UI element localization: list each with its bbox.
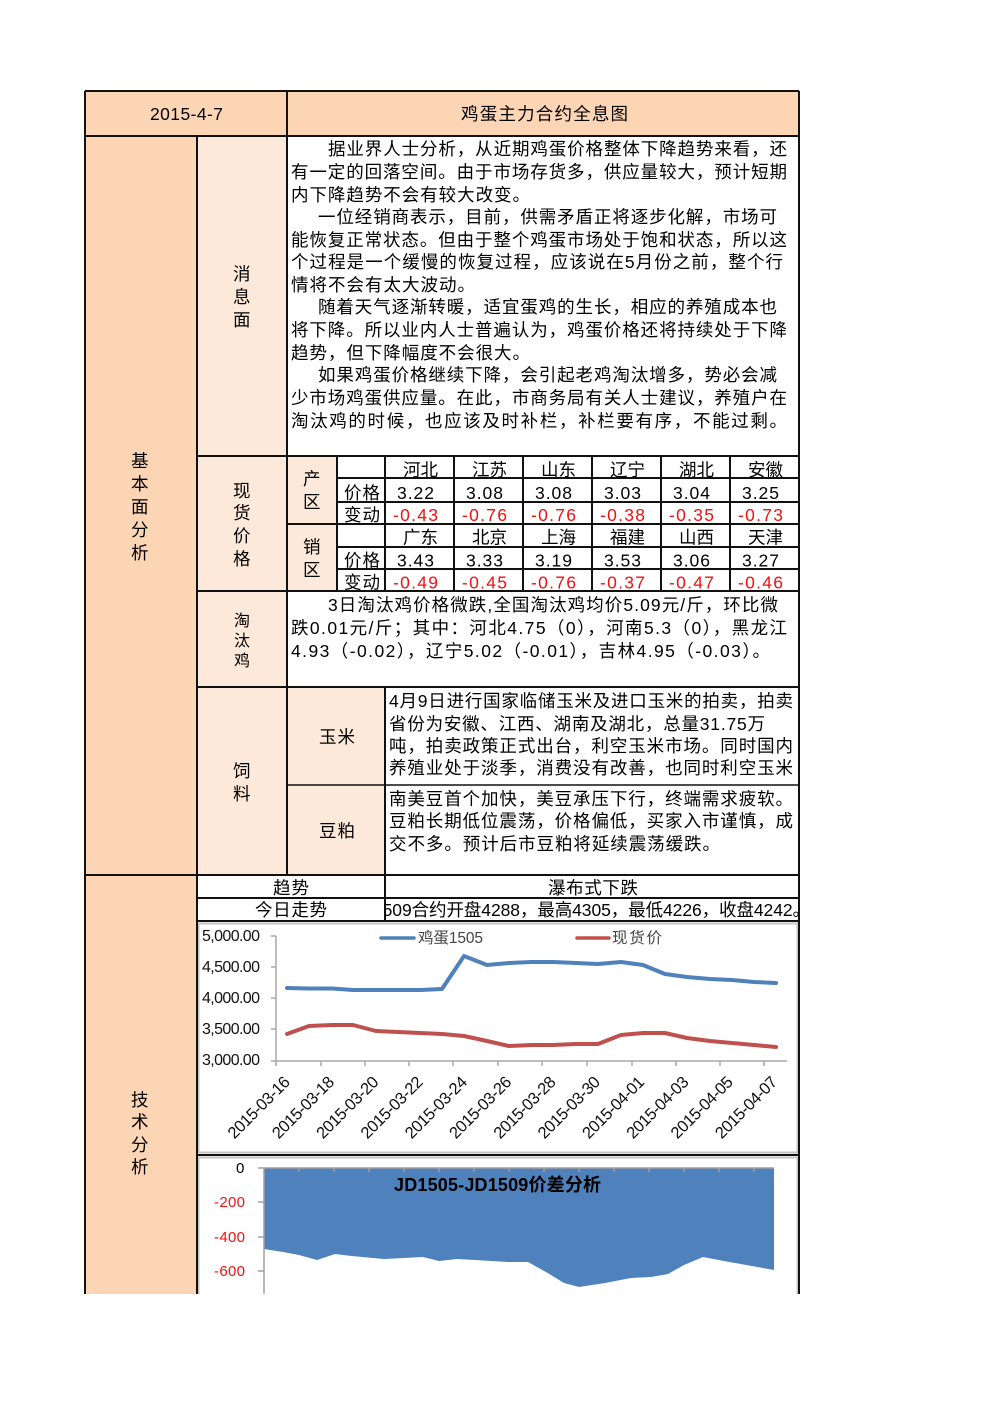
x axis: 2015-04-07 xyxy=(712,1073,781,1142)
news label: 面 xyxy=(233,310,250,330)
spot label: 货 xyxy=(233,503,250,523)
series: spot price xyxy=(287,1025,776,1047)
feed label: 饲 xyxy=(233,761,250,781)
x axis: 2015-04-05 xyxy=(668,1073,737,1142)
selling region table: 3.43 xyxy=(397,550,434,570)
panel: fundamental analysis sidebar: 本 xyxy=(131,474,148,494)
news text block: 内下降趋势不会有较大改变。 xyxy=(291,185,530,205)
soybean meal text: 豆粕长期低位震荡，价格偏低，买家入市谨慎，成 xyxy=(389,811,793,831)
culled chicken label: 鸡 xyxy=(234,652,250,670)
selling region table: -0.45 xyxy=(462,572,507,592)
selling region table: 福建 xyxy=(610,528,645,548)
news text block: 据业界人士分析，从近期鸡蛋价格整体下降趋势来看，还 xyxy=(328,139,788,159)
corn text: 4月9日进行国家临储玉米及进口玉米的拍卖，拍卖 xyxy=(389,691,793,711)
producing region table: -0.35 xyxy=(669,505,714,525)
x axis: 2015-03-28 xyxy=(490,1073,560,1142)
soybean meal text xyxy=(389,789,793,854)
panel: technical analysis sidebar: 技 xyxy=(131,1090,148,1110)
selling region table: 价格 xyxy=(344,550,380,570)
series: egg 1505 xyxy=(287,956,776,990)
table grid xyxy=(85,91,799,1294)
panel: feed xyxy=(197,687,793,875)
legend: egg 1505: 鸡蛋1505 xyxy=(418,929,483,947)
y axis labels: -400 xyxy=(214,1229,245,1246)
spot label: 格 xyxy=(233,549,251,569)
culled chicken label: 汰 xyxy=(234,632,250,650)
culled chicken label xyxy=(197,591,287,687)
selling region table: -0.37 xyxy=(600,572,645,592)
corn label: 玉米 xyxy=(319,727,355,747)
soybean meal text: 南美豆首个加快，美豆承压下行，终端需求疲软。 xyxy=(389,789,793,809)
panel: fundamental analysis sidebar: 析 xyxy=(131,543,148,563)
producing region table xyxy=(344,460,784,525)
x axis: 2015-03-26 xyxy=(446,1073,515,1142)
news label: 息 xyxy=(233,287,250,307)
panel: technical analysis sidebar: 分 xyxy=(131,1135,148,1155)
soybean meal label xyxy=(287,785,385,875)
today value: 1509合约开盘4288，最高4305，最低4226，收盘4242。 xyxy=(373,900,810,920)
selling region label: 区 xyxy=(303,560,320,580)
page bottom cutoff xyxy=(0,1294,992,1403)
producing region table: 河北 xyxy=(403,460,438,480)
panel: technical analysis sidebar: 术 xyxy=(131,1112,148,1132)
x axis: 2015-03-20 xyxy=(313,1073,382,1142)
producing region table: 3.08 xyxy=(535,483,572,503)
y axis xyxy=(202,928,276,1069)
feed label: 料 xyxy=(233,784,250,804)
panel: fundamental analysis sidebar: 分 xyxy=(131,520,148,540)
selling region table: 3.19 xyxy=(535,550,572,570)
news text block: 能恢复正常状态。但由于整个鸡蛋市场处于饱和状态，所以这 xyxy=(291,230,787,250)
y axis: 5,000.00 xyxy=(202,928,260,945)
selling region table: 变动 xyxy=(344,572,380,592)
producing region table: -0.43 xyxy=(393,505,438,525)
panel: fundamental analysis sidebar xyxy=(85,136,197,875)
x axis: 2015-03-16 xyxy=(225,1073,294,1142)
news text block: 趋势，但下降幅度不会很大。 xyxy=(291,343,530,363)
x axis xyxy=(225,1061,787,1142)
producing region label: 区 xyxy=(303,492,320,512)
selling region table: -0.49 xyxy=(393,572,438,592)
y axis labels xyxy=(214,1160,245,1280)
today label: 今日走势 xyxy=(255,900,327,920)
news text block: 将下降。所以业内人士普遍认为，鸡蛋价格还将持续处于下降 xyxy=(291,320,787,340)
culled chicken text: 3日淘汰鸡价格微跌,全国淘汰鸡均价5.09元/斤，环比微 xyxy=(328,595,778,615)
producing region label: 产 xyxy=(303,469,320,489)
soybean meal label: 豆粕 xyxy=(319,821,355,841)
panel: culled chicken xyxy=(197,591,787,687)
corn text: 省份为安徽、江西、湖南及湖北，总量31.75万 xyxy=(389,714,765,734)
panel: trend rows xyxy=(255,878,810,920)
selling region table: 上海 xyxy=(541,528,576,548)
selling region table: 天津 xyxy=(748,528,783,548)
news label xyxy=(197,136,287,456)
spot label: 现 xyxy=(233,481,250,501)
y axis labels: 0 xyxy=(236,1160,244,1177)
producing region table: 3.03 xyxy=(604,483,641,503)
soybean meal text: 交不多。预计后市豆粕将延续震荡缓跌。 xyxy=(389,834,720,854)
producing region table: 3.25 xyxy=(742,483,779,503)
news label: 消 xyxy=(233,264,250,284)
selling region table: 广东 xyxy=(403,528,438,548)
legend: spot price xyxy=(577,929,662,947)
producing region table: -0.38 xyxy=(600,505,645,525)
panel: technical analysis sidebar xyxy=(85,875,197,1294)
x axis: 2015-04-01 xyxy=(579,1073,648,1142)
selling region table: 3.06 xyxy=(673,550,710,570)
news text block: 淘汰鸡的时候，也应该及时补栏，补栏要有序，不能过剩。 xyxy=(291,411,787,431)
x axis: 2015-03-18 xyxy=(269,1073,338,1142)
corn text: 养殖业处于淡季，消费没有改善，也同时利空玉米 xyxy=(389,758,793,778)
corn label xyxy=(287,687,385,785)
news text block: 有一定的回落空间。由于市场存货多，供应量较大，预计短期 xyxy=(291,162,787,182)
selling region table: 3.33 xyxy=(466,550,503,570)
legend: spot price: 现货价 xyxy=(612,929,662,947)
selling region table: 北京 xyxy=(472,528,507,548)
x axis: 2015-03-30 xyxy=(535,1073,604,1142)
selling region table: -0.76 xyxy=(531,572,576,592)
trend label: 趋势 xyxy=(273,878,309,898)
producing region table: 江苏 xyxy=(472,460,507,480)
news text block: 少市场鸡蛋供应量。在此，市商务局有关人士建议，养殖户在 xyxy=(291,388,787,408)
panel: fundamental analysis sidebar: 面 xyxy=(131,497,148,517)
axes xyxy=(258,1168,774,1294)
culled chicken label: 淘 xyxy=(234,612,250,630)
trend value: 瀑布式下跌 xyxy=(548,878,638,898)
producing region table: 3.22 xyxy=(397,483,434,503)
panel: fundamental analysis sidebar: 基 xyxy=(131,451,148,471)
news text block: 一位经销商表示，目前，供需矛盾正将逐步化解，市场可 xyxy=(318,207,777,227)
corn text xyxy=(389,691,793,778)
panel: spot prices xyxy=(197,456,784,592)
feed label xyxy=(197,687,287,875)
selling region table xyxy=(344,528,783,592)
news text block xyxy=(291,139,788,431)
selling region table: -0.46 xyxy=(738,572,783,592)
date: 2015-4-7 xyxy=(150,104,223,124)
x axis: 2015-03-24 xyxy=(402,1073,471,1142)
y axis labels: -200 xyxy=(214,1194,245,1211)
area chart: JD1505-JD1509 spread xyxy=(198,1158,798,1298)
producing region table: 辽宁 xyxy=(610,460,645,480)
legend: egg 1505 xyxy=(381,929,483,947)
culled chicken text: 跌0.01元/斤；其中：河北4.75（0），河南5.3（0），黑龙江 xyxy=(291,618,787,638)
news text block: 随着天气逐渐转暖，适宜蛋鸡的生长，相应的养殖成本也 xyxy=(318,297,777,317)
selling region table: -0.47 xyxy=(669,572,714,592)
selling region table: 3.53 xyxy=(604,550,641,570)
producing region table: -0.73 xyxy=(738,505,783,525)
producing region table: 3.08 xyxy=(466,483,503,503)
y axis: 4,000.00 xyxy=(202,990,260,1007)
line chart: egg futures vs spot xyxy=(198,924,798,1152)
panel: header row xyxy=(85,91,799,136)
y axis: 3,000.00 xyxy=(202,1052,260,1069)
x axis: 2015-03-22 xyxy=(357,1073,427,1142)
title: 鸡蛋主力合约全息图 xyxy=(461,104,628,124)
corn text: 吨，拍卖政策正式出台，利空玉米市场。同时国内 xyxy=(389,736,793,756)
panel: technical analysis sidebar: 析 xyxy=(131,1157,148,1177)
news text block: 个过程是一个缓慢的恢复过程，应该说在5月份之前，整个行 xyxy=(291,252,783,272)
selling region table: 3.27 xyxy=(742,550,779,570)
culled chicken text xyxy=(291,595,787,661)
selling region label: 销 xyxy=(303,537,320,557)
spot label xyxy=(197,456,287,591)
producing region label xyxy=(287,456,337,524)
spot label: 价 xyxy=(233,526,250,546)
news text block: 如果鸡蛋价格继续下降，会引起老鸡淘汰增多，势必会减 xyxy=(318,365,777,385)
producing region table: 安徽 xyxy=(748,460,784,480)
producing region table: 3.04 xyxy=(673,483,710,503)
chart title: JD1505-JD1509价差分析 xyxy=(394,1174,601,1195)
producing region table: 变动 xyxy=(344,505,380,525)
selling region label xyxy=(287,524,337,592)
y axis: 4,500.00 xyxy=(202,959,260,976)
spread area xyxy=(264,1168,774,1287)
producing region table: 价格 xyxy=(344,483,380,503)
producing region table: -0.76 xyxy=(531,505,576,525)
culled chicken text: 4.93（-0.02），辽宁5.02（-0.01），吉林4.95（-0.03）。 xyxy=(291,641,770,661)
producing region table: -0.76 xyxy=(462,505,507,525)
x axis: 2015-04-03 xyxy=(623,1073,693,1142)
y axis labels: -600 xyxy=(214,1263,245,1280)
producing region table: 湖北 xyxy=(679,460,714,480)
panel: news section xyxy=(197,136,788,456)
producing region table: 山东 xyxy=(541,460,576,480)
y axis: 3,500.00 xyxy=(202,1021,260,1038)
selling region table: 山西 xyxy=(679,528,714,548)
news text block: 情将不会有太大波动。 xyxy=(291,275,475,295)
